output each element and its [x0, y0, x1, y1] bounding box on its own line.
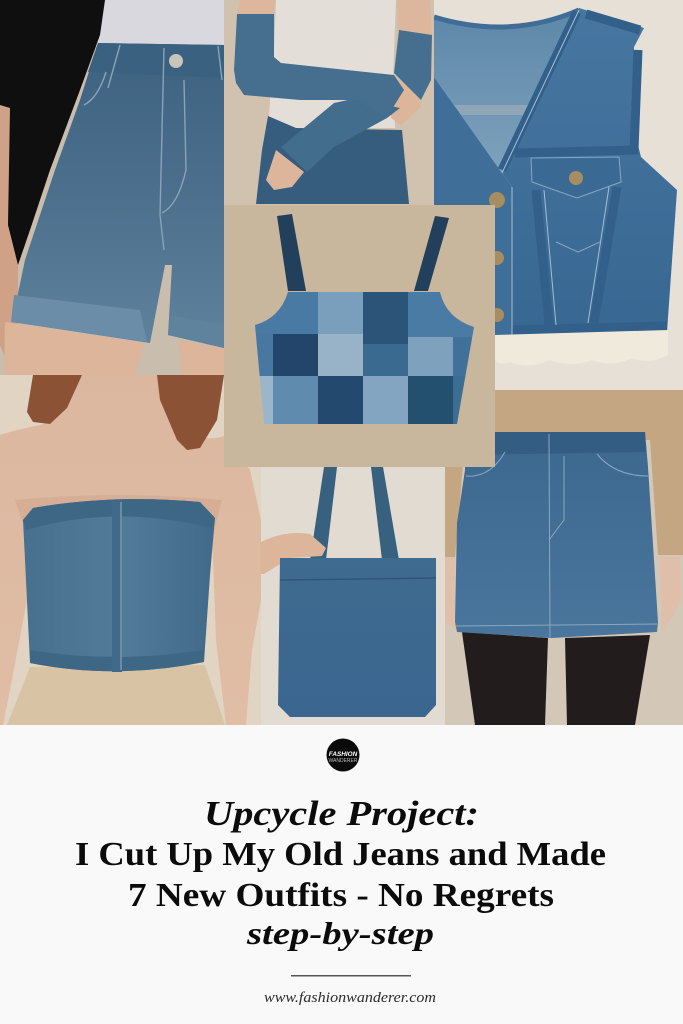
icon: vest left front [434, 77, 512, 340]
panel: denim skirt photo [445, 390, 683, 725]
icon: hand lower [266, 150, 304, 190]
icon: tights [462, 632, 650, 725]
icon: buttons [489, 171, 583, 322]
icon: center seam [112, 500, 122, 672]
icon: skirt seams [456, 434, 657, 637]
icon: right sleeve [394, 30, 432, 100]
icon: hem band [30, 650, 204, 671]
icon: top band [23, 499, 215, 530]
icon: vest collar [434, 10, 579, 27]
icon: waistband [88, 43, 222, 72]
icon: patchwork grid [250, 290, 478, 424]
icon: right cuff [168, 331, 224, 348]
icon: black blazer [0, 0, 105, 265]
icon: auburn hair left [27, 375, 82, 424]
icon: logo badge: WANDERER [329, 758, 358, 764]
icon: metal button [169, 54, 183, 68]
icon: jeans [256, 116, 409, 204]
website url: www.fashionwanderer.com [264, 990, 436, 1006]
icon: upper sleeve [234, 14, 404, 106]
icon: white tank [268, 0, 396, 128]
title: step-by-step [246, 915, 434, 951]
icon: lace trim [495, 330, 668, 366]
icon: white top [96, 0, 224, 46]
panel: arm warmers photo [224, 0, 434, 205]
icon: tote hem [280, 578, 436, 580]
icon: skirt waistband [465, 432, 646, 455]
title: Upcycle Project: [204, 794, 479, 833]
icon: pocket curve [556, 242, 600, 252]
icon: logo badge: FASHION [329, 751, 358, 758]
icon: hand [261, 533, 326, 574]
icon: tote straps [310, 467, 399, 560]
title: I Cut Up My Old Jeans and Made [75, 836, 606, 873]
icon: shorts [12, 43, 224, 348]
panel: tube top photo [0, 375, 261, 725]
icon: sweater [445, 390, 683, 557]
icon: stitching highlights [502, 10, 609, 335]
icon: chest pocket [531, 157, 621, 198]
icon: fly seam [84, 45, 222, 250]
icon: skin torso and arms [0, 375, 261, 725]
panel: patchwork top photo [224, 205, 495, 467]
icon: logo badge [326, 738, 360, 772]
panel: tote bag photo [261, 467, 445, 725]
panel: denim vest photo [434, 0, 683, 390]
icon: straps [277, 214, 449, 291]
icon: tote body [278, 558, 436, 717]
icon: beige trousers [7, 665, 225, 725]
title: 7 New Outfits - No Regrets [128, 877, 554, 914]
icon: skirt [455, 432, 658, 638]
icon: back stitch band [454, 105, 528, 115]
icon: chest shading [15, 495, 222, 530]
icon: hand upper [391, 77, 421, 125]
icon: vest back inner [434, 10, 579, 173]
icon: lower sleeve [281, 98, 400, 172]
icon: auburn hair right [157, 375, 224, 450]
icon: denim tube top [23, 499, 215, 671]
icon: left arm [0, 105, 18, 360]
panel: denim shorts photo [0, 0, 224, 375]
divider line [291, 975, 411, 976]
icon: left cuff [11, 295, 147, 342]
icon: hands [445, 557, 682, 633]
footer panel [0, 725, 683, 1024]
icon: stitched bands [502, 12, 667, 330]
icon: vest right front [502, 8, 677, 337]
icon: legs [4, 322, 224, 375]
icon: seam highlight [120, 502, 122, 670]
title [75, 794, 606, 951]
icon: upper arms [237, 0, 432, 35]
